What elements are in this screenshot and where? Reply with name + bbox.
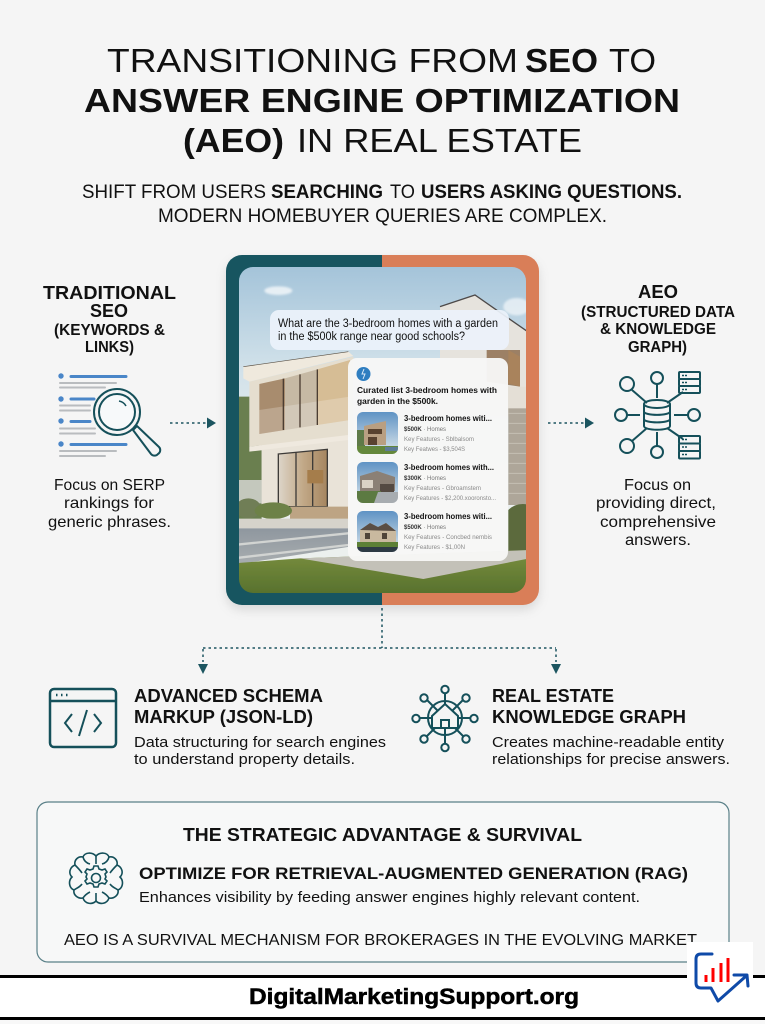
title: (AEO) (183, 122, 284, 159)
icon: database knowledge graph (615, 372, 700, 458)
listing 2: $300K · Homes (404, 476, 446, 482)
split frame (226, 255, 539, 605)
subtitle: TO (390, 181, 415, 203)
heading: AEO (581, 281, 735, 356)
text: focus on direct answers: comprehensive (600, 514, 716, 531)
heading: AEO: AEO (638, 281, 678, 302)
listing 1: Key Featwes - $3,504S (404, 447, 465, 453)
panel: strategic advantage (37, 802, 729, 962)
card heading (357, 386, 497, 406)
heading: knowledge graph (492, 686, 686, 727)
heading: knowledge graph: KNOWLEDGE GRAPH (492, 707, 686, 727)
answer card (348, 358, 508, 561)
text: focus on direct answers (596, 477, 716, 549)
listing 1: $500K · Homes (404, 427, 446, 433)
listing 2: 3-bedroom homes with... (404, 463, 494, 472)
title: TRANSITIONING FROM (107, 42, 518, 79)
listing 1: Key Features - Sblbalsom (404, 437, 474, 443)
text: focus on SERP: Focus on SERP (54, 477, 165, 494)
heading: traditional SEO (43, 282, 176, 356)
panel: traditional SEO (43, 282, 176, 531)
heading: schema (134, 686, 323, 727)
subtitle: SHIFT FROM USERS (82, 181, 266, 203)
listing 3 (357, 511, 492, 552)
icon: search results with magnifying glass (58, 373, 160, 456)
text: focus on SERP: rankings for (64, 495, 155, 512)
heading: traditional SEO: TRADITIONAL (43, 282, 176, 303)
text: knowledge graph body: relationships for precise answers. (492, 751, 730, 768)
panel: AEO (581, 281, 735, 549)
panel: real estate knowledge graph (412, 686, 730, 768)
speech bubble: user question: What are the 3-bedroom homes with a garden (278, 318, 498, 330)
heading: traditional SEO: LINKS) (85, 339, 134, 356)
upper volume (249, 357, 353, 447)
text: schema body (134, 734, 386, 768)
subtitle: MODERN HOMEBUYER QUERIES ARE COMPLEX. (158, 205, 607, 227)
text: RAG: Enhances visibility by feeding answer engines highly relevant content. (139, 889, 640, 906)
text: schema body: Data structuring for search engines (134, 734, 386, 751)
panel: central AI search mockup (226, 255, 539, 610)
right volume (440, 295, 530, 417)
lower volume (262, 440, 348, 506)
listing 3: $500K · Homes (404, 525, 446, 531)
text: survival statement: AEO IS A SURVIVAL MECHANISM FOR BROKERAGES IN THE EVOLVING MARKET (64, 932, 697, 949)
panel: advanced schema markup (50, 686, 386, 768)
heading: AEO: GRAPH) (628, 339, 687, 356)
heading: traditional SEO: (KEYWORDS & (54, 322, 165, 339)
text: RAG: OPTIMIZE FOR RETRIEVAL-AUGMENTED GENERATION (RAG) (139, 864, 688, 883)
subtitle: SEARCHING (271, 181, 383, 203)
heading: traditional SEO: SEO (90, 300, 128, 321)
text: knowledge graph body: Creates machine-readable entity (492, 734, 725, 751)
heading: AEO: (STRUCTURED DATA (581, 304, 735, 321)
photo: modern house (233, 263, 530, 597)
card heading: garden in the $500k. (357, 397, 438, 406)
listing 3: Key Features - Concbed nembis (404, 535, 492, 541)
icon: assistant logo (356, 367, 370, 381)
title: TO (609, 42, 656, 79)
title: SEO (525, 42, 598, 79)
arrow: branching connector (198, 608, 561, 674)
text: focus on SERP (48, 477, 171, 531)
arrow: SEO to centre (170, 418, 216, 428)
listing 3: Key Features - $1,00N (404, 545, 465, 551)
subtitle (82, 181, 682, 227)
heading: knowledge graph: REAL ESTATE (492, 686, 614, 706)
text: focus on SERP: generic phrases. (48, 514, 171, 531)
listing 2: Key Features - Gbroamstem (404, 486, 481, 492)
listing 1: 3-bedroom homes witi... (404, 414, 492, 423)
text: focus on direct answers: answers. (625, 532, 691, 549)
card heading: Curated list 3-bedroom homes with (357, 386, 497, 395)
entry steps and hedges (290, 507, 348, 520)
heading: schema: ADVANCED SCHEMA (134, 686, 323, 706)
lawn (239, 550, 526, 593)
listing 3: 3-bedroom homes witi... (404, 512, 492, 521)
far trees (239, 396, 262, 519)
heading: AEO: & KNOWLEDGE (600, 321, 716, 338)
walkway and steps (233, 519, 350, 528)
text: focus on direct answers: Focus on (624, 477, 691, 494)
listing 1 (357, 412, 492, 454)
subtitle: USERS ASKING QUESTIONS. (421, 181, 682, 203)
text: schema body: to understand property details. (134, 751, 355, 768)
heading: schema: MARKUP (JSON-LD) (134, 707, 313, 727)
speech bubble: user question: in the $500k range near good schools? (278, 331, 465, 343)
listing 2 (357, 462, 496, 503)
text: focus on direct answers: providing direct, (596, 495, 716, 512)
icon: brain with gear (70, 853, 122, 903)
listing 2: Key Features - $2,200.xooronsto... (404, 496, 496, 502)
speech bubble: user question (270, 310, 509, 350)
icon: house knowledge graph (412, 686, 478, 751)
title: IN REAL ESTATE (297, 122, 582, 159)
footer site name: DigitalMarketingSupport.org (249, 984, 579, 1009)
title (84, 42, 680, 159)
footer (0, 975, 765, 1024)
logo (687, 942, 753, 1001)
text: knowledge graph body (492, 734, 730, 768)
text: RAG (139, 864, 688, 906)
title: ANSWER ENGINE OPTIMIZATION (84, 82, 680, 119)
icon: code window (50, 689, 116, 747)
arrow: centre to AEO (548, 418, 594, 428)
heading: strategic advantage: THE STRATEGIC ADVANTAGE & SURVIVAL (183, 825, 582, 845)
